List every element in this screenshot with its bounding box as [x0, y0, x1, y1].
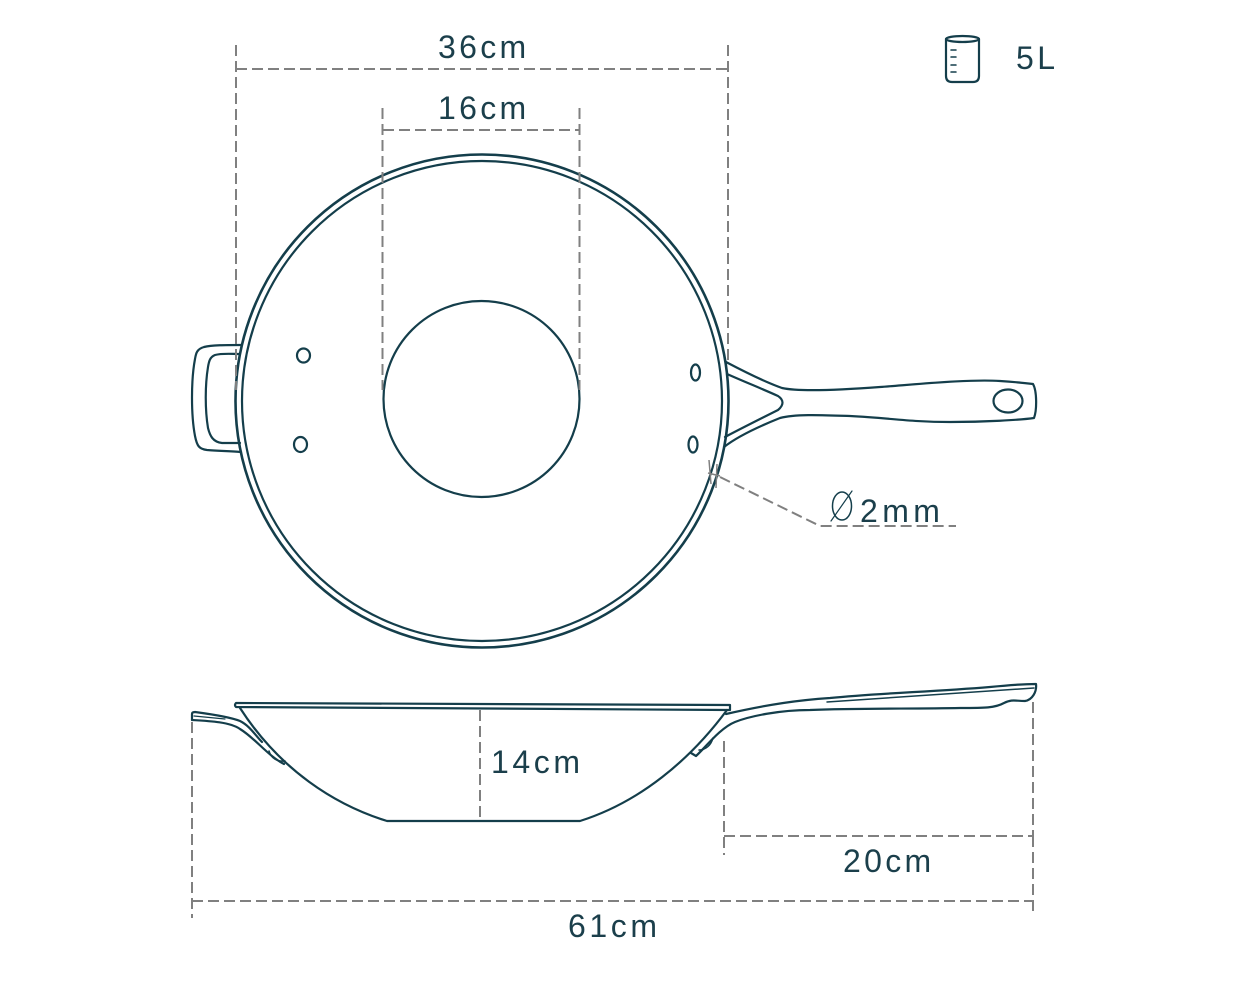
right handle: [691, 684, 1036, 756]
icon: long handle: [724, 362, 1036, 447]
dimension: 20cm: [724, 702, 1033, 879]
lid rim: [235, 703, 730, 710]
left handle: [192, 712, 285, 764]
dimension: 14cm: [480, 710, 584, 821]
flat base circle: [384, 301, 580, 497]
dimension: 14cm: 14cm: [491, 744, 584, 780]
rivets: [294, 348, 700, 452]
dimension: 36cm: [236, 29, 728, 390]
dimension: 20cm: 20cm: [843, 843, 934, 879]
dimension: 36cm: 36cm: [438, 29, 529, 65]
icon: loop handle: [192, 345, 241, 452]
dimension: wall thickness 2mm: [708, 460, 956, 529]
dimension: 61cm: [192, 722, 1033, 944]
side view of wok: [192, 684, 1036, 821]
inner rim: [242, 161, 722, 641]
dimension: 16cm: 16cm: [438, 90, 529, 126]
icon: measuring cup: [946, 36, 979, 82]
wok body: [240, 708, 727, 821]
top view of wok: [192, 154, 1036, 648]
dimension: wall thickness 2mm: 2mm: [860, 493, 944, 529]
capacity: 5L: [946, 36, 1059, 82]
outer rim: [236, 154, 728, 648]
dimension: 16cm: [382, 90, 580, 390]
dimension: 61cm: 61cm: [568, 908, 661, 944]
capacity: 5L: 5L: [1016, 40, 1059, 76]
